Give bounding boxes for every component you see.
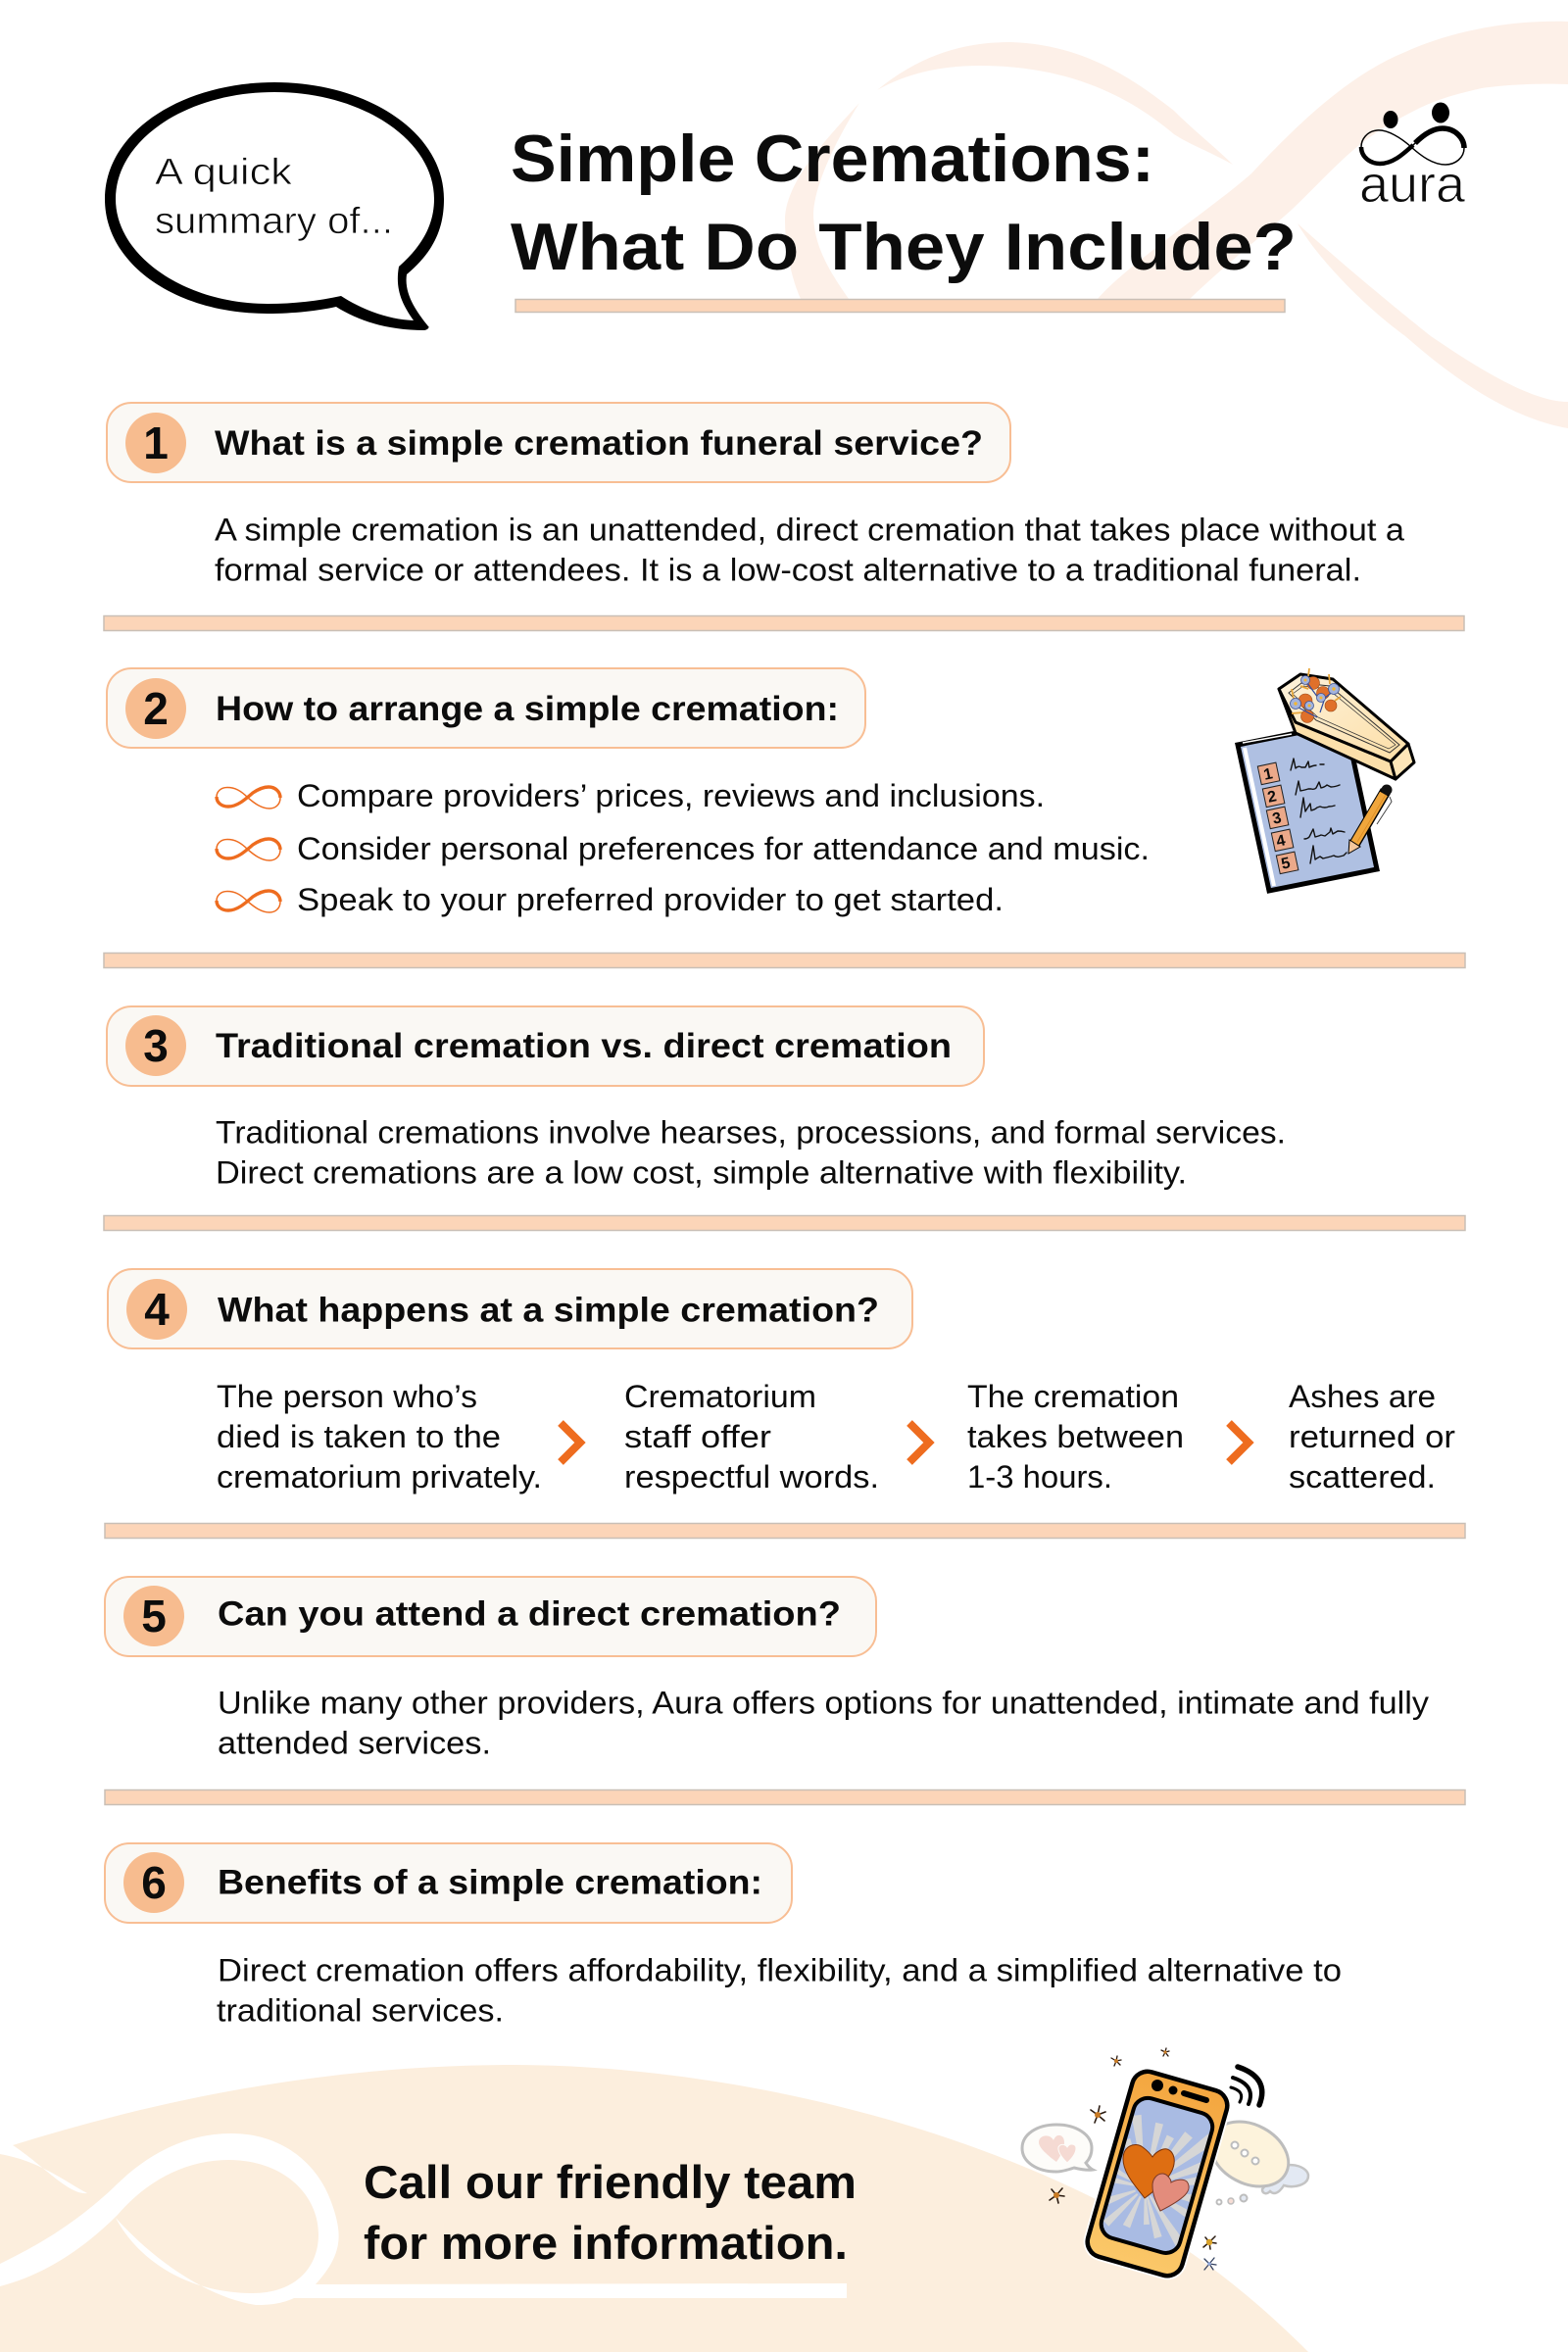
icon: hearts: [1123, 2144, 1189, 2211]
screen rays: [1103, 2115, 1209, 2246]
logo: aura: [1359, 102, 1466, 214]
coffin with flowers: [1279, 668, 1414, 779]
sparkle centres: [1054, 2050, 1212, 2266]
body text 1: formal service or attendees. It is a low-cost alternative to a traditional funeral.: [215, 553, 1361, 588]
icon: infinity bullet 1: [217, 787, 280, 808]
pill heading 1: What is a simple cremation funeral service?: [215, 424, 983, 463]
body text 1: A simple cremation is an unattended, direct cremation that takes place without a: [215, 512, 1404, 547]
speech bubble with hearts: [1022, 2125, 1093, 2172]
bullet text 3: Speak to your preferred provider to get started.: [297, 882, 1004, 917]
pill heading 5: Can you attend a direct cremation?: [218, 1595, 841, 1633]
body text 3: Traditional cremations involve hearses, processions, and formal services.: [216, 1115, 1286, 1151]
step 1: [217, 1379, 542, 1494]
arrow 2: [909, 1423, 929, 1462]
logo: aura: aura: [1359, 156, 1466, 214]
title: [511, 122, 1297, 284]
pill heading 3: Traditional cremation vs. direct cremation: [216, 1027, 952, 1065]
body text 5: Unlike many other providers, Aura offers options for unattended, intimate and fully: [218, 1686, 1429, 1721]
bullet list: [217, 778, 1150, 917]
step 4: returned or: [1289, 1419, 1455, 1454]
body text 6: Direct cremation offers affordability, flexibility, and a simplified alternative to: [218, 1952, 1342, 1987]
pill heading 5: [105, 1577, 876, 1656]
icon: infinity bullet 2: [217, 839, 280, 860]
body text 6: [217, 1952, 1342, 2029]
arrow 1: [561, 1423, 580, 1462]
pill heading 6: 6: [141, 1857, 167, 1908]
step 1: crematorium privately.: [217, 1459, 542, 1494]
pill heading 4: [108, 1269, 912, 1348]
footer background shape: [0, 2065, 1308, 2352]
speech bubble with dots: [1200, 2109, 1308, 2205]
sparkles: [1050, 2048, 1216, 2270]
pill heading 6: Benefits of a simple cremation:: [218, 1864, 762, 1901]
pill heading 2: [107, 668, 865, 748]
body text 5: [218, 1686, 1429, 1760]
call to action text: for more information.: [364, 2217, 848, 2269]
call to action text: [364, 2156, 857, 2269]
call to action text: Call our friendly team: [364, 2156, 857, 2208]
step 1: The person who’s: [217, 1379, 477, 1414]
footer infinity ribbon with underline: [0, 2133, 847, 2305]
paper checklist: 3: [1271, 809, 1283, 828]
speech bubble: a quick summary of: [105, 82, 444, 330]
pill heading 6: [105, 1843, 792, 1923]
body text 3: [216, 1115, 1286, 1190]
arrow 3: [1229, 1423, 1249, 1462]
illustration: checklist, coffin and pencil: [1238, 668, 1414, 891]
speech bubble: a quick summary of: A quick: [155, 152, 293, 193]
illustration: phone with hearts and speech bubbles: [1022, 2048, 1308, 2279]
title: Simple Cremations:: [511, 122, 1154, 196]
step 2: respectful words.: [624, 1459, 879, 1494]
pill heading 5: 5: [141, 1591, 167, 1642]
step 3: 1-3 hours.: [967, 1459, 1112, 1494]
panel: section 2: [107, 668, 1414, 917]
icon: infinity bullet 3: [217, 891, 280, 912]
paper checklist: 4: [1275, 832, 1287, 851]
step 3: The cremation: [967, 1379, 1179, 1414]
panel: section 5: [105, 1577, 1429, 1760]
pill heading 4: What happens at a simple cremation?: [218, 1292, 879, 1329]
phone camera and speaker: [1152, 2080, 1206, 2100]
pill heading 2: 2: [143, 683, 169, 734]
step 1: died is taken to the: [217, 1419, 501, 1454]
title underline: [515, 300, 1285, 312]
step 3: takes between: [967, 1419, 1184, 1454]
paper checklist: 1: [1262, 765, 1274, 784]
pencil: [1348, 784, 1392, 854]
pill heading 3: 3: [143, 1020, 169, 1071]
panel: section 1: [107, 403, 1404, 588]
step 2: Crematorium: [624, 1379, 816, 1414]
step 2: staff offer: [624, 1419, 771, 1454]
speech bubble: a quick summary of: summary of...: [155, 201, 393, 242]
bullet text 1: Compare providers’ prices, reviews and inclusions.: [297, 778, 1045, 813]
pill heading 2: How to arrange a simple cremation:: [216, 690, 839, 728]
phone body: [1084, 2068, 1231, 2279]
pill heading 4: 4: [144, 1284, 170, 1335]
paper checklist: [1238, 723, 1377, 891]
step 4: scattered.: [1289, 1459, 1436, 1494]
panel: section 4: [108, 1269, 1455, 1494]
pill heading 1: 1: [143, 417, 169, 468]
body text 5: attended services.: [218, 1725, 491, 1760]
pill heading 3: [107, 1006, 984, 1086]
body text 6: traditional services.: [217, 1993, 504, 2029]
step 4: Ashes are: [1289, 1379, 1436, 1414]
step 3: [967, 1379, 1184, 1494]
bullet text 2: Consider personal preferences for attendance and music.: [297, 831, 1150, 866]
pill heading 1: [107, 403, 1010, 482]
paper checklist: 5: [1280, 855, 1292, 873]
title: What Do They Include?: [511, 210, 1297, 284]
panel: section 3: [107, 1006, 1286, 1190]
body text 1: [215, 512, 1404, 588]
step 2: [624, 1379, 879, 1494]
body text 3: Direct cremations are a low cost, simple alternative with flexibility.: [216, 1154, 1187, 1190]
background ribbon: header infinity: [785, 22, 1568, 428]
panel: section 6: [105, 1843, 1342, 2029]
step 4: [1289, 1379, 1455, 1494]
paper checklist: 2: [1266, 788, 1278, 807]
icon: signal waves: [1231, 2067, 1262, 2105]
